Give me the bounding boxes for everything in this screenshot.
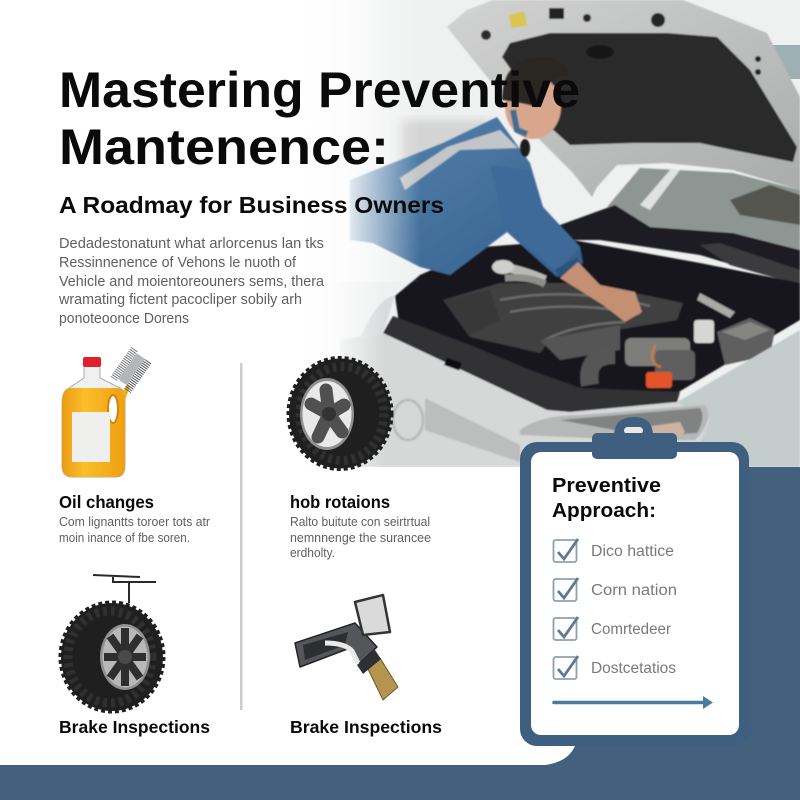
intake pipes [495, 265, 545, 280]
headlight [520, 405, 708, 440]
tire rotations text: hob rotaions [290, 492, 390, 512]
car hood [447, 0, 800, 197]
cowl and wipers [559, 204, 800, 271]
clipboard heading [552, 474, 661, 522]
checklist item 2: Corn nation [591, 582, 677, 599]
title: Mantenence: [59, 119, 389, 175]
checklist item 3 [554, 617, 671, 640]
oil changes text: Com lignantts toroer tots atr [59, 515, 210, 529]
title [59, 62, 580, 175]
clipboard heading: Approach: [552, 499, 656, 522]
tire rotations text: nemnnenge the surancee [290, 531, 431, 545]
tire rotations text [290, 492, 431, 560]
intro paragraph: Vehicle and moientoreouners sems, thera [59, 274, 325, 290]
intro paragraph: ponoteoonce Dorens [59, 311, 189, 327]
engine fittings [625, 338, 690, 366]
subtitle: A Roadmay for Business Owners [59, 192, 444, 218]
engine bay [395, 240, 800, 393]
mechanic head [505, 75, 561, 139]
photo: mechanic working under car hood [300, 0, 800, 470]
icon: tire for rotations [288, 358, 392, 470]
checklist item 1 [554, 539, 674, 562]
icon: oil bottle with filter brush [62, 349, 149, 477]
checklist item 2 [554, 578, 677, 601]
title: Mastering Preventive [59, 62, 580, 118]
divider [240, 363, 242, 710]
icon: brake caliper tool [295, 595, 398, 700]
mechanic shirt [350, 117, 583, 277]
arrow [554, 696, 713, 709]
checklist item 1: Dico hattice [591, 543, 674, 560]
tire rotations text: Ralto buitute con seirtrtual [290, 515, 430, 529]
intro paragraph [58, 236, 325, 327]
panel: clipboard preventive approach [520, 417, 749, 746]
turbo pipe [589, 355, 615, 385]
engine cover [443, 283, 683, 353]
tire rotations text: erdholty. [290, 546, 335, 560]
windshield [607, 168, 800, 250]
checklist item 3: Comrtedeer [591, 621, 671, 638]
oil changes text: Oil changes [59, 492, 154, 512]
grille badge [393, 400, 423, 440]
oil changes text: moin inance of fbe soren. [59, 531, 190, 545]
intro paragraph: wramating fictent pacocliper sobily arh [58, 292, 302, 308]
oil changes text [59, 492, 210, 545]
car front bumper [344, 332, 710, 467]
intro paragraph: Ressinnenence of Vehons le nuoth of [59, 255, 297, 271]
intro paragraph: Dedadestonatunt what arlorcenus lan tks [59, 236, 324, 252]
brake inspections label 1: Brake Inspections [59, 717, 210, 737]
clipboard heading: Preventive [552, 474, 661, 497]
checklist item 4: Dostcetatios [591, 660, 676, 677]
hood insulation underside [502, 33, 797, 162]
brake inspections label 2: Brake Inspections [290, 717, 442, 737]
icon: tire with brake gauge [60, 575, 164, 712]
checklist item 4 [554, 656, 676, 679]
mechanic arm and hand [560, 262, 642, 322]
black radiator support [383, 316, 680, 412]
